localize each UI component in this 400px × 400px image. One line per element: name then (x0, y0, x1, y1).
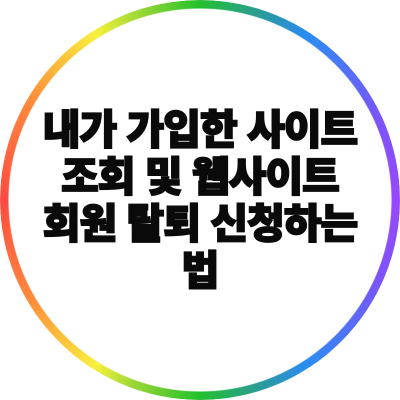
title (43, 106, 358, 294)
title: 내가 가입한 사이트 (43, 106, 357, 152)
title: 법 (182, 248, 218, 294)
title: 조회 및 웹사이트 (61, 154, 339, 200)
title: 회원 탈퇴 신청하는 (43, 200, 357, 246)
